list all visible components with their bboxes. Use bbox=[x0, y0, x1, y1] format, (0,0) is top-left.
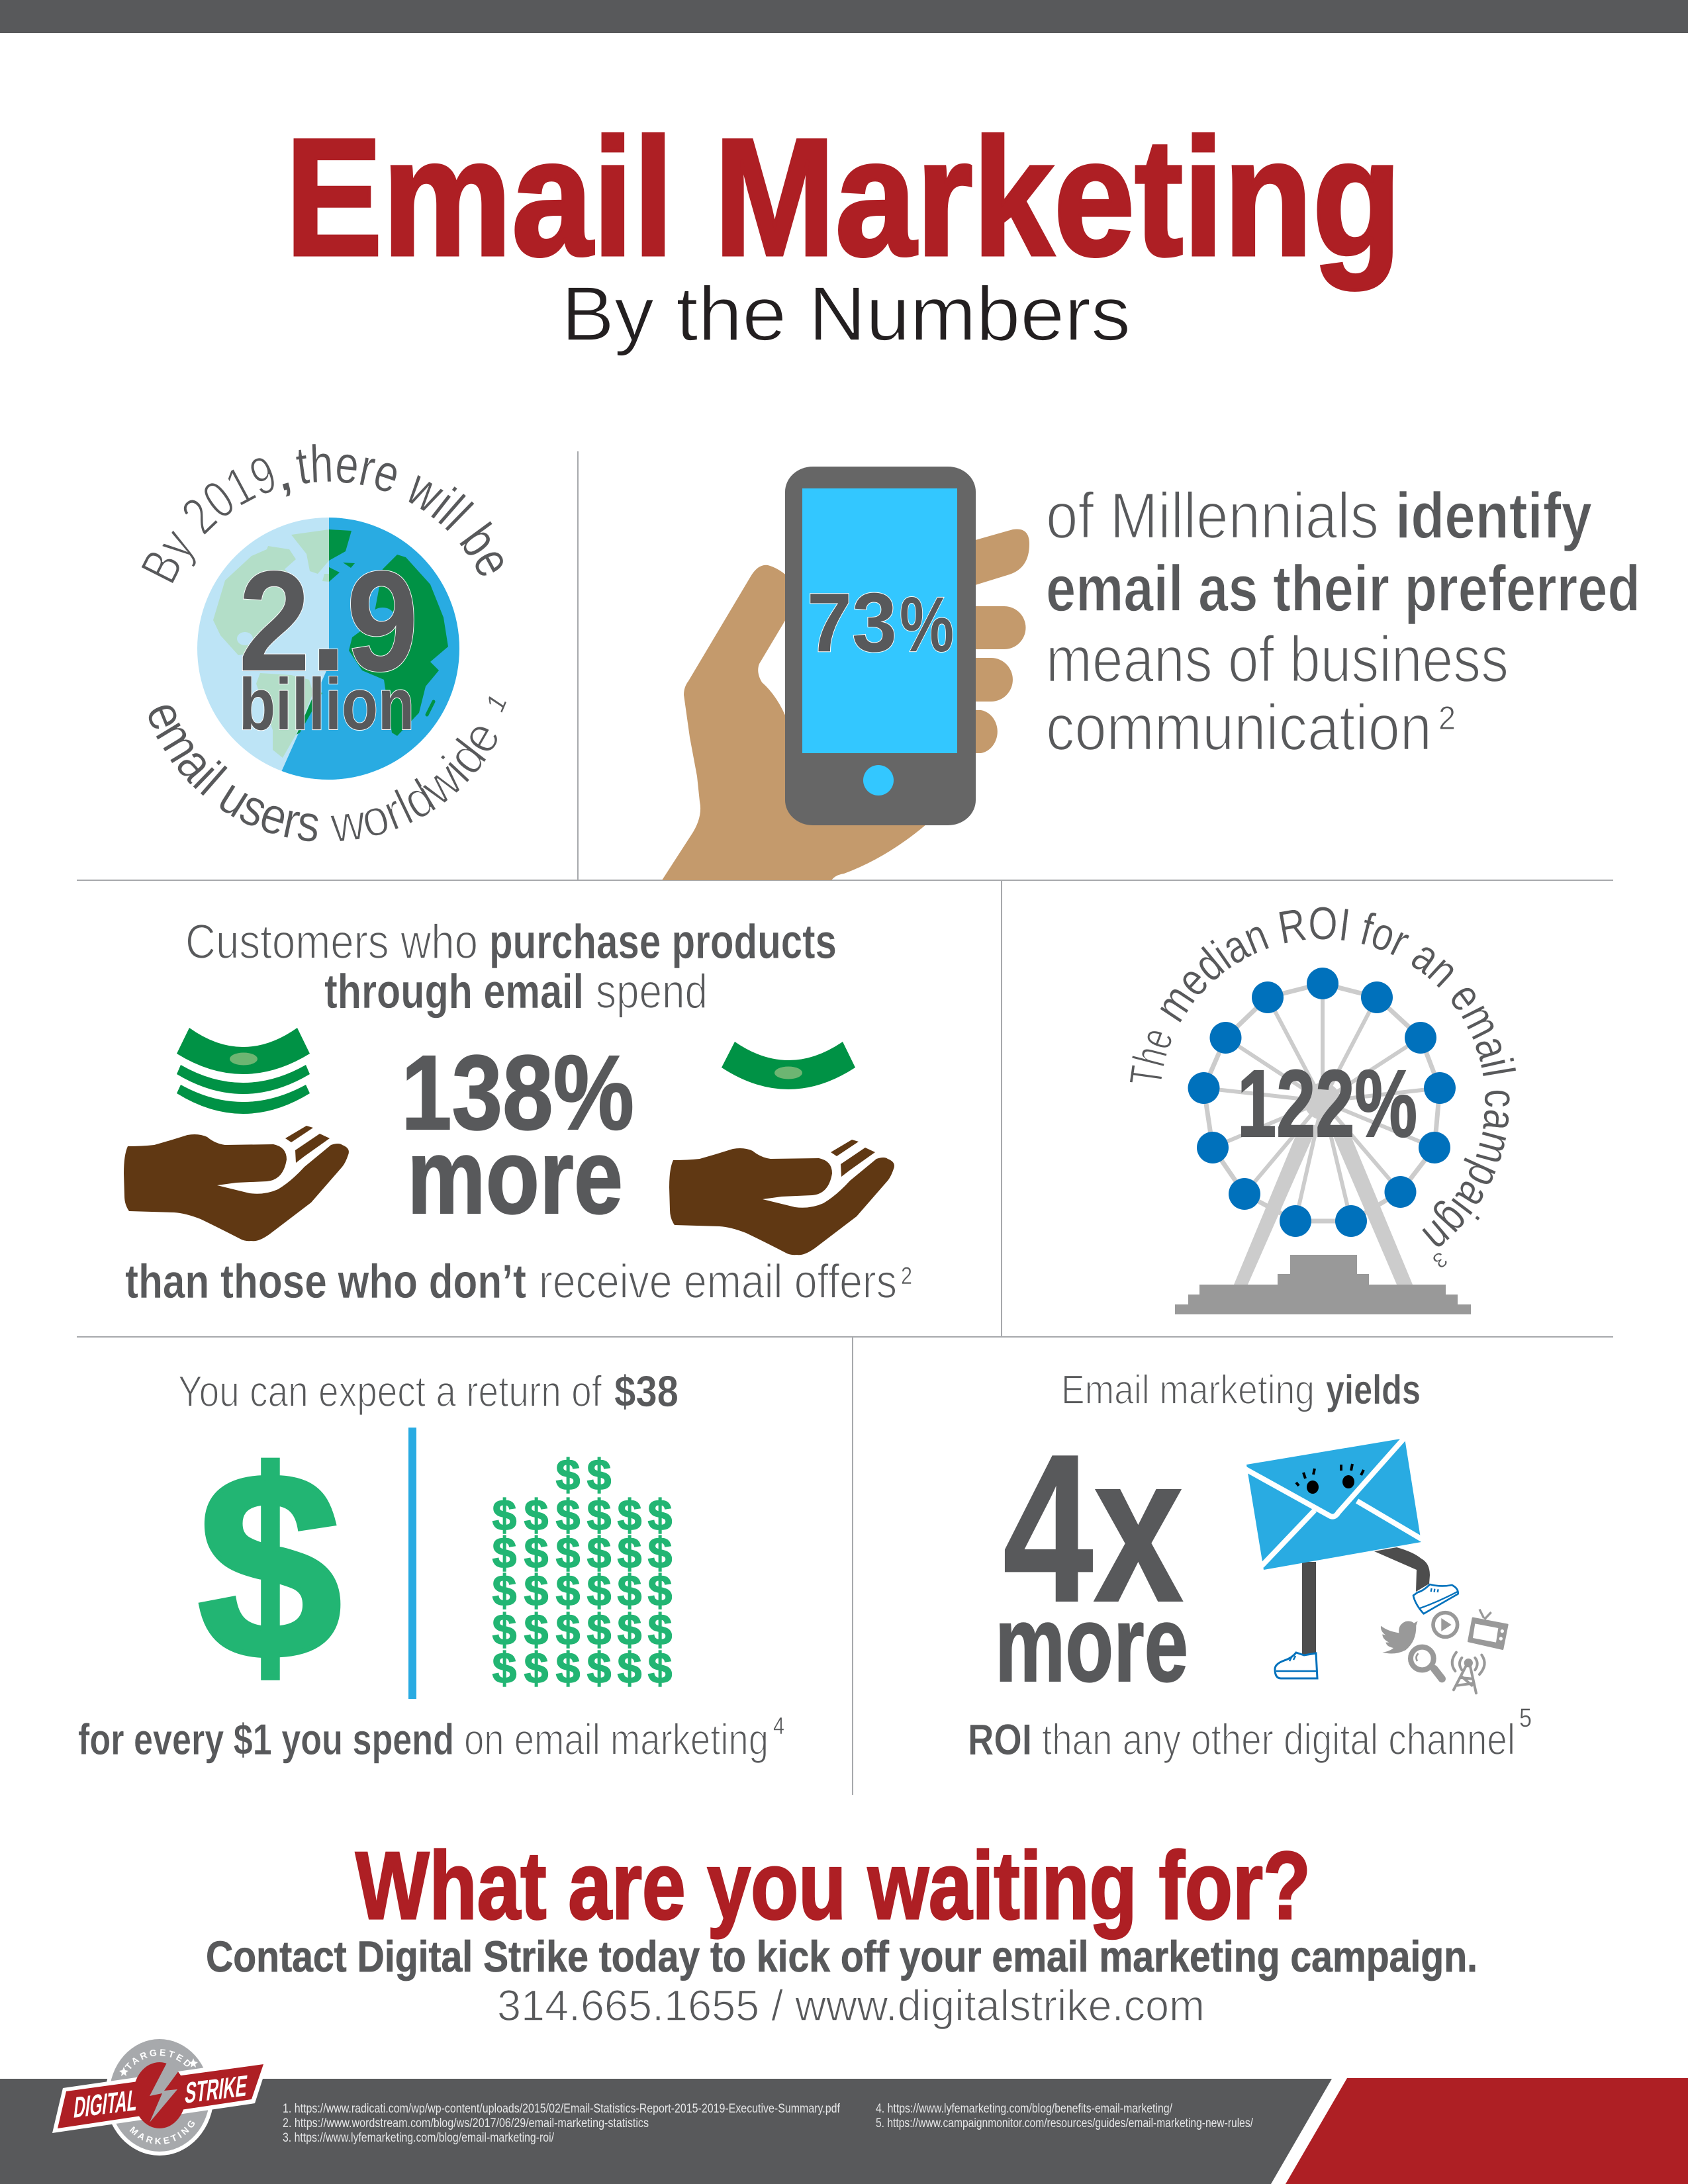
icon: hand left bbox=[124, 1126, 349, 1241]
references: 3. https://www.lyfemarketing.com/blog/email-marketing-roi/ bbox=[283, 2131, 555, 2145]
icon: grid of dollar signs: $ bbox=[524, 1528, 548, 1577]
icon: grid of dollar signs: $ bbox=[587, 1450, 611, 1499]
curved text: median ROI: 3 bbox=[1429, 1247, 1452, 1273]
curved text: bottom bbox=[148, 691, 513, 842]
icon: grid of dollar signs: $ bbox=[524, 1605, 548, 1654]
heading text: purchase products bbox=[489, 915, 837, 969]
icon: grid of dollar signs: $ bbox=[618, 1566, 641, 1615]
icon: grid of dollar signs: $ bbox=[587, 1605, 611, 1654]
icon: money stack bbox=[177, 1028, 310, 1114]
text block: for every $1 bbox=[78, 1712, 784, 1764]
references: 2. https://www.wordstream.com/blog/ws/2017/06/29/email-marketing-statistics bbox=[283, 2116, 649, 2130]
heading text: Customers who bbox=[185, 915, 478, 969]
heading text bbox=[185, 915, 837, 1019]
divider bar bbox=[408, 1428, 416, 1699]
icon: grid of dollar signs: $ bbox=[492, 1643, 516, 1692]
text block: than those bbox=[125, 1255, 912, 1308]
curved text: top: there will be bbox=[296, 444, 503, 576]
statistic: 4x: 4x bbox=[1003, 1411, 1185, 1646]
heading text: $38 bbox=[614, 1367, 679, 1416]
references: 5. https://www.campaignmonitor.com/resources/guides/email-marketing-new-rules/ bbox=[876, 2116, 1254, 2130]
logo: Digital Strike: TARGETED bbox=[124, 2049, 191, 2069]
call to action: What are you waiting for? bbox=[355, 1832, 1311, 1939]
icon: grid of dollar signs: $ bbox=[524, 1490, 548, 1539]
text block: for every $1: on email marketing bbox=[464, 1715, 769, 1764]
text block: millennials: of Millennials bbox=[1046, 479, 1379, 552]
icon: grid of dollar signs: $ bbox=[618, 1528, 641, 1577]
heading text: Email marketing bbox=[1061, 1367, 1315, 1413]
panel: 73% of millennials bbox=[662, 467, 1640, 880]
curved text: median ROI: The bbox=[1130, 1031, 1172, 1083]
panel: 122% ROI bbox=[1130, 907, 1516, 1314]
curved text: top: By 2019 bbox=[142, 458, 274, 583]
logo: Digital Strike: DIGITAL bbox=[72, 2084, 139, 2124]
curved text: bottom: worldwide bbox=[330, 727, 497, 841]
text block: ROI than any: 5 bbox=[1519, 1704, 1532, 1733]
icon: grid of dollar signs: $ bbox=[618, 1643, 641, 1692]
panel: 138% more bbox=[124, 915, 912, 1308]
curved text: median ROI: median ROI for an email campaign bbox=[1160, 907, 1516, 1247]
text block: millennials: means of business bbox=[1046, 623, 1509, 696]
icon: grid of dollar signs: $ bbox=[492, 1605, 516, 1654]
curved text: bottom: email users bbox=[148, 705, 318, 842]
icon: grid of dollar signs: $ bbox=[587, 1528, 611, 1577]
text block: millennials: communication bbox=[1046, 691, 1432, 764]
icon: grid of dollar signs: $ bbox=[587, 1643, 611, 1692]
text block: millennials: identify bbox=[1395, 479, 1592, 552]
text block: than those: 2 bbox=[901, 1262, 912, 1289]
footer band bbox=[0, 2078, 1688, 2184]
references bbox=[283, 2102, 1254, 2145]
logo: Digital Strike: STRIKE bbox=[183, 2070, 249, 2110]
statistic: 73%: 73 bbox=[807, 576, 897, 669]
icon: grid of dollar signs: $ bbox=[618, 1605, 641, 1654]
text block: ROI than any: ROI bbox=[968, 1715, 1032, 1764]
icon: grid of dollar signs: $ bbox=[524, 1566, 548, 1615]
icon: grid of dollar signs: $ bbox=[648, 1605, 672, 1654]
heading text: yields bbox=[1326, 1367, 1421, 1413]
icon: grid of dollar signs: $ bbox=[556, 1528, 580, 1577]
text block: for every $1: for every $1 you spend bbox=[78, 1715, 454, 1764]
icon: grid of dollar signs: $ bbox=[587, 1566, 611, 1615]
text block: than those: than those who don’t bbox=[125, 1255, 526, 1308]
icon: hand holding phone bbox=[662, 467, 1029, 880]
text block: for every $1: 4 bbox=[773, 1712, 784, 1739]
panel: 2.9 billion email users bbox=[142, 444, 513, 842]
curved text: top: , bbox=[271, 451, 295, 500]
heading text: You can expect a return of bbox=[178, 1367, 602, 1416]
text block: millennials bbox=[1046, 479, 1640, 764]
icon: grid of dollar signs: $ bbox=[492, 1566, 516, 1615]
panel: return of $38 bbox=[78, 1367, 784, 1764]
call to action bbox=[206, 1832, 1477, 2030]
icon: globe bbox=[197, 510, 470, 788]
heading text: through email bbox=[324, 965, 584, 1019]
statistic: more: more bbox=[995, 1583, 1188, 1704]
statistic: 73% bbox=[807, 576, 954, 669]
icon: grid of dollar signs: $ bbox=[556, 1605, 580, 1654]
icon: grid of dollar signs: $ bbox=[556, 1450, 580, 1499]
panel: 4x more ROI bbox=[968, 1367, 1532, 1764]
title bbox=[285, 105, 1401, 357]
text block: than those: receive email offers bbox=[539, 1255, 897, 1308]
icon: running envelope bbox=[1244, 1436, 1430, 1678]
icon: grid of dollar signs: $ bbox=[648, 1528, 672, 1577]
title: By the Numbers bbox=[561, 271, 1131, 357]
statistic: 138%: 138% bbox=[401, 1033, 634, 1152]
icon: large dollar sign: $ bbox=[198, 1418, 342, 1715]
statistic: 73%: % bbox=[900, 581, 954, 668]
statistic: billion: billion bbox=[239, 664, 414, 745]
curved text: top bbox=[142, 444, 503, 583]
icon: grid of dollar signs: $ bbox=[492, 1490, 516, 1539]
icon: grid of dollar signs bbox=[492, 1450, 672, 1692]
top bar bbox=[0, 0, 1688, 33]
call to action: Contact Digital Strike today to kick off your email marketing campaign. bbox=[206, 1932, 1477, 1981]
statistic: more: more bbox=[407, 1117, 623, 1236]
icon: grid of dollar signs: $ bbox=[492, 1528, 516, 1577]
icon: grid of dollar signs: $ bbox=[648, 1643, 672, 1692]
heading text: spend bbox=[596, 965, 708, 1019]
statistic: 2.9: 2.9 bbox=[238, 541, 418, 701]
icon: grid of dollar signs: $ bbox=[556, 1490, 580, 1539]
icon: grid of dollar signs: $ bbox=[556, 1566, 580, 1615]
icon: hand right bbox=[669, 1140, 894, 1255]
icons: digital channels bbox=[1381, 1584, 1507, 1693]
text block: ROI than any: than any other digital channel bbox=[1042, 1715, 1515, 1764]
icon: grid of dollar signs: $ bbox=[587, 1490, 611, 1539]
logo: Digital Strike: MARKETING bbox=[130, 2120, 195, 2144]
text block: millennials: 2 bbox=[1438, 700, 1456, 737]
text block: ROI than any bbox=[968, 1704, 1532, 1764]
icon: grid of dollar signs: $ bbox=[648, 1490, 672, 1539]
curved text: bottom: 1 bbox=[481, 691, 513, 716]
statistic: 122%: 122% bbox=[1237, 1050, 1417, 1157]
logo: Digital Strike bbox=[52, 2039, 263, 2156]
icon: grid of dollar signs: $ bbox=[524, 1643, 548, 1692]
icon: grid of dollar signs: $ bbox=[556, 1643, 580, 1692]
icon: grid of dollar signs: $ bbox=[618, 1490, 641, 1539]
title: Email Marketing bbox=[285, 105, 1401, 291]
call to action: 314.665.1655 / www.digitalstrike.com bbox=[497, 1981, 1205, 2030]
references: 1. https://www.radicati.com/wp/wp-content/uploads/2015/02/Email-Statistics-Report-2015-2019-Executive-Summary.pdf bbox=[283, 2102, 841, 2116]
icon: single bill bbox=[722, 1042, 855, 1089]
icon: ferris wheel bbox=[1175, 968, 1471, 1314]
references: 4. https://www.lyfemarketing.com/blog/benefits-email-marketing/ bbox=[876, 2102, 1173, 2116]
icon: grid of dollar signs: $ bbox=[648, 1566, 672, 1615]
